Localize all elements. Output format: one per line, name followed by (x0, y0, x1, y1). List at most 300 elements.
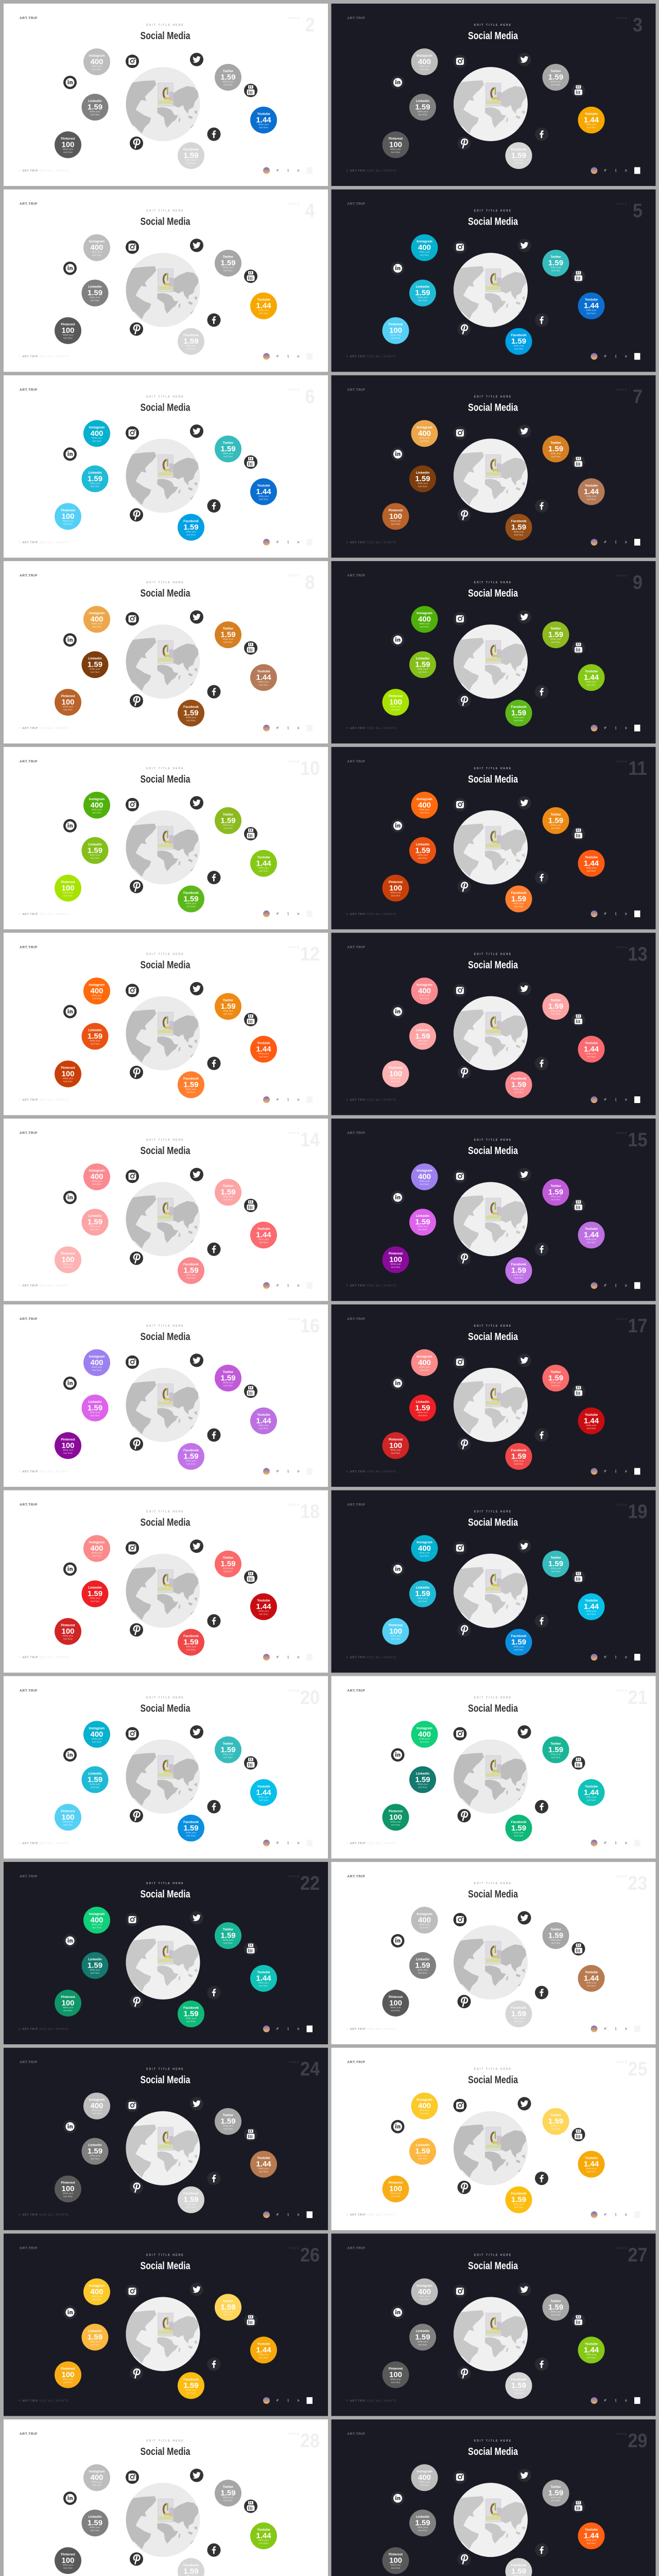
Twitter: Write your (550, 824, 561, 826)
world globe (119, 67, 200, 141)
Youtube: text here (259, 2171, 268, 2173)
Linkedin (81, 837, 108, 864)
world globe (119, 810, 200, 885)
page number: 28 (300, 2429, 320, 2452)
Instagram: text here (420, 1555, 429, 1557)
Facebook: Write your (513, 1831, 524, 1834)
Instagram: Instagram (417, 798, 432, 801)
Instagram: Instagram (417, 983, 432, 987)
Twitter: Twitter (223, 1742, 234, 1745)
Instagram: Instagram (89, 1541, 105, 1545)
Instagram: 400 (90, 1916, 103, 1925)
Linkedin: Write your (90, 854, 100, 856)
brand: ART.TRIP (20, 1131, 38, 1135)
Linkedin: Write your (418, 482, 428, 484)
Facebook: text here (514, 905, 524, 908)
Instagram: text here (92, 2484, 101, 2486)
Twitter (543, 807, 569, 834)
Instagram: 400 (90, 1730, 103, 1739)
page number (617, 2429, 648, 2452)
Facebook: text here (186, 1091, 196, 1093)
Linkedin: Write your (418, 1411, 428, 1414)
slide 16 (4, 1304, 328, 1487)
Facebook (506, 328, 532, 355)
Facebook (178, 2372, 204, 2399)
Pinterest: 100 (389, 884, 402, 892)
Pinterest: Pinterest (389, 1624, 403, 1628)
Linkedin (409, 465, 436, 492)
Instagram (411, 792, 438, 819)
Twitter: Twitter (550, 1556, 561, 1560)
slide 10 (4, 747, 328, 929)
Pinterest: Pinterest (389, 1066, 403, 1070)
Linkedin (81, 1952, 108, 1979)
Twitter (543, 993, 569, 1020)
Linkedin: 1.59 (415, 846, 430, 855)
brand: ART.TRIP (347, 946, 365, 949)
Facebook: Write your (513, 716, 524, 719)
Pinterest: 100 (61, 1813, 75, 1822)
world globe (119, 1182, 200, 1256)
Instagram: text here (92, 439, 101, 442)
title: Social Media (141, 1888, 190, 1900)
Linkedin: text here (418, 113, 427, 116)
world globe (447, 810, 528, 885)
page number: PAGE (289, 574, 300, 578)
Facebook (178, 1257, 204, 1284)
title: Social Media (141, 30, 190, 41)
page number: PAGE (617, 2247, 628, 2250)
Linkedin: text here (91, 2529, 100, 2532)
Twitter: 1.59 (220, 1745, 236, 1754)
section label: EDIT TITLE HERE (474, 1882, 512, 1885)
Linkedin: 1.59 (415, 2147, 430, 2156)
footer: © ART.TRIP 2022 ALL RIGHTS (346, 2027, 396, 2031)
page number (289, 757, 320, 779)
Instagram (83, 2278, 110, 2305)
Instagram: text here (92, 997, 101, 999)
Youtube (578, 107, 604, 133)
Youtube: Write your (258, 1610, 269, 1613)
brand: ART.TRIP (20, 2061, 38, 2064)
Pinterest: text here (391, 522, 401, 525)
Pinterest: 100 (389, 1999, 402, 2007)
Facebook: Facebook (183, 148, 199, 151)
Pinterest: Write your (63, 519, 74, 522)
Linkedin: Write your (90, 1597, 100, 1600)
page number: PAGE (289, 2433, 300, 2436)
Pinterest: Pinterest (61, 1438, 76, 1442)
Instagram: Write your (419, 436, 430, 439)
Linkedin: Write your (90, 296, 100, 299)
Pinterest: 100 (389, 1070, 402, 1078)
page number: 4 (305, 199, 315, 222)
Youtube: text here (259, 312, 268, 315)
Facebook: Facebook (511, 148, 527, 151)
Twitter: Twitter (550, 441, 561, 445)
Pinterest: Write your (390, 1820, 401, 1823)
Linkedin: Linkedin (416, 657, 429, 660)
Twitter: Twitter (550, 1370, 561, 1374)
Twitter: Write your (223, 824, 234, 826)
brand: ART.TRIP (347, 388, 365, 392)
Instagram: Write your (419, 1737, 430, 1740)
Facebook: text here (514, 162, 524, 164)
Facebook (178, 2558, 204, 2576)
Twitter: Twitter (550, 2114, 561, 2117)
Facebook (506, 1815, 532, 1841)
Linkedin: Write your (418, 1969, 428, 1971)
Instagram: text here (92, 811, 101, 814)
Instagram: 400 (418, 987, 431, 995)
footer: © ART.TRIP 2022 ALL RIGHTS (346, 912, 396, 916)
Pinterest: Pinterest (389, 1438, 403, 1442)
world globe (447, 67, 528, 141)
Twitter: Twitter (223, 1556, 234, 1560)
Pinterest: Write your (390, 148, 401, 150)
Twitter: text here (551, 455, 561, 457)
Facebook: text here (186, 2392, 196, 2394)
Linkedin (81, 1395, 108, 1421)
Linkedin (81, 2138, 108, 2165)
Pinterest: Write your (63, 2378, 74, 2380)
Twitter (543, 1551, 569, 1578)
page number: 29 (628, 2429, 648, 2452)
page number: 25 (628, 2058, 648, 2080)
Facebook: Write your (186, 1274, 197, 1276)
Instagram (83, 2093, 110, 2120)
page number (289, 199, 315, 222)
Linkedin (409, 651, 436, 678)
world globe (447, 2483, 528, 2557)
Pinterest (382, 1060, 409, 1087)
brand: ART.TRIP (347, 760, 365, 764)
slide 24 (4, 2048, 328, 2230)
Twitter: text here (551, 83, 561, 86)
title: Social Media (141, 216, 190, 227)
footer: © ART.TRIP 2022 ALL RIGHTS (19, 1656, 69, 1659)
Twitter (215, 435, 241, 462)
Linkedin: Write your (418, 1040, 428, 1042)
Instagram: Write your (419, 808, 430, 811)
Instagram: text here (92, 625, 101, 628)
Linkedin: Write your (418, 2340, 428, 2343)
social icons (63, 1725, 257, 1822)
Linkedin: Write your (90, 110, 100, 113)
Facebook: text here (186, 2206, 196, 2209)
Twitter: Write your (223, 2310, 234, 2313)
Instagram: Write your (92, 1366, 102, 1368)
Facebook: text here (186, 348, 196, 350)
Twitter (543, 64, 569, 91)
Linkedin: 1.59 (88, 1218, 102, 1227)
Twitter (543, 2294, 569, 2320)
Linkedin: text here (418, 1600, 427, 1603)
Instagram (83, 1163, 110, 1190)
Twitter: Write your (550, 1753, 561, 1755)
Pinterest: Pinterest (389, 1995, 403, 1999)
Pinterest: Pinterest (61, 2553, 76, 2556)
Instagram: Instagram (417, 1726, 432, 1730)
Twitter: 1.59 (548, 1188, 563, 1197)
world globe (119, 624, 200, 699)
Facebook: Facebook (183, 2192, 199, 2196)
Pinterest: text here (63, 2195, 73, 2198)
Youtube: text here (259, 1799, 268, 1801)
Youtube: Youtube (585, 1042, 598, 1045)
Pinterest (382, 1804, 409, 1831)
Instagram: text here (420, 997, 429, 999)
Youtube: Youtube (257, 670, 270, 673)
Instagram: Instagram (89, 1912, 105, 1916)
Youtube: 1.44 (584, 1231, 599, 1240)
Pinterest (55, 1618, 81, 1645)
slide 3 (332, 4, 656, 186)
Pinterest: 100 (61, 140, 75, 149)
Linkedin: Linkedin (88, 1772, 102, 1775)
Facebook: 1.59 (183, 1266, 199, 1275)
Youtube: Youtube (257, 1785, 270, 1788)
Youtube (250, 664, 277, 691)
Linkedin: Linkedin (88, 843, 102, 846)
Youtube (250, 1036, 277, 1062)
Twitter: text here (551, 1198, 561, 1201)
page number (289, 1500, 320, 1522)
Facebook (178, 700, 204, 726)
Twitter: text here (223, 1384, 233, 1387)
Youtube (578, 2522, 604, 2549)
Pinterest: 100 (61, 2556, 75, 2565)
Facebook: text here (514, 1834, 524, 1837)
world globe (447, 438, 528, 513)
Youtube (578, 1594, 604, 1620)
title: Social Media (141, 2260, 190, 2272)
Pinterest: 100 (389, 140, 402, 149)
Facebook: Facebook (511, 2192, 527, 2196)
Facebook: Write your (186, 902, 197, 905)
Instagram: Instagram (417, 1541, 432, 1545)
Facebook: text here (186, 533, 196, 536)
Youtube: Youtube (257, 484, 270, 487)
Linkedin: Linkedin (88, 2515, 102, 2519)
page number: PAGE (617, 1689, 628, 1692)
Pinterest (382, 1618, 409, 1645)
page number (289, 13, 315, 36)
Linkedin: text here (418, 2343, 427, 2346)
page number (617, 199, 643, 222)
brand: ART.TRIP (347, 1875, 365, 1878)
Facebook (178, 1072, 204, 1098)
Youtube: Youtube (585, 112, 598, 116)
Instagram: 400 (90, 429, 103, 438)
Linkedin: Linkedin (88, 2329, 102, 2333)
Facebook: text here (514, 1463, 524, 1465)
Pinterest: Pinterest (389, 1809, 403, 1813)
page number (617, 1686, 648, 1708)
Youtube: text here (259, 1055, 268, 1058)
Facebook (178, 328, 204, 355)
Facebook: 1.59 (511, 337, 526, 346)
Twitter (215, 1736, 241, 1763)
Instagram: text here (420, 254, 429, 257)
page number: PAGE (289, 2247, 300, 2250)
Twitter: 1.59 (548, 1560, 563, 1568)
Instagram: Instagram (417, 240, 432, 244)
brand: ART.TRIP (347, 1317, 365, 1321)
Twitter: text here (551, 1756, 561, 1758)
Twitter: Write your (223, 638, 234, 640)
footer (19, 1468, 313, 1475)
Pinterest: Write your (390, 1635, 401, 1637)
world globe (447, 1739, 528, 1814)
Pinterest: Pinterest (61, 1252, 76, 1256)
page number: PAGE (289, 388, 300, 392)
Linkedin: 1.59 (88, 1403, 102, 1412)
Twitter: Write your (550, 452, 561, 454)
Instagram: Instagram (89, 798, 105, 801)
Twitter: 1.59 (548, 816, 563, 825)
Linkedin: text here (418, 485, 427, 487)
Youtube (250, 2522, 277, 2549)
Youtube: Youtube (257, 1599, 270, 1603)
Pinterest: Write your (390, 1449, 401, 1451)
Linkedin (81, 1023, 108, 1050)
Facebook: Write your (513, 1088, 524, 1090)
Linkedin: Linkedin (88, 1214, 102, 1218)
Pinterest: 100 (61, 1256, 75, 1264)
Twitter (543, 250, 569, 277)
Instagram: 400 (90, 58, 103, 66)
Pinterest: text here (391, 1823, 401, 1826)
Twitter: Write your (223, 2496, 234, 2499)
Linkedin: Write your (418, 296, 428, 299)
Instagram (83, 1349, 110, 1376)
Instagram: 400 (418, 243, 431, 252)
Linkedin (81, 94, 108, 121)
Facebook (506, 2558, 532, 2576)
page number (617, 1500, 648, 1522)
social icons (63, 239, 257, 336)
Twitter: Twitter (223, 1184, 234, 1188)
Linkedin: text here (91, 113, 100, 116)
page number: 2 (305, 13, 315, 36)
Instagram: text here (92, 2112, 101, 2115)
Pinterest: Pinterest (61, 323, 76, 327)
Youtube (578, 2336, 604, 2363)
social icons (63, 1353, 257, 1451)
page number (289, 1872, 320, 1894)
Pinterest: Pinterest (61, 1809, 76, 1813)
Twitter: 1.59 (548, 1374, 563, 1382)
footer: © ART.TRIP 2022 ALL RIGHTS (346, 2399, 396, 2402)
Pinterest (382, 1246, 409, 1273)
Youtube: text here (259, 126, 268, 129)
Youtube: Youtube (585, 2157, 598, 2160)
Facebook: text here (514, 2206, 524, 2209)
Instagram (411, 1349, 438, 1376)
Instagram (83, 792, 110, 819)
Facebook: 1.59 (511, 1638, 526, 1647)
footer (346, 353, 640, 360)
Linkedin: text here (91, 1228, 100, 1231)
section label: EDIT TITLE HERE (146, 1882, 184, 1885)
Facebook: 1.59 (183, 1080, 199, 1089)
page number: 23 (628, 1872, 648, 1894)
section label: EDIT TITLE HERE (146, 767, 184, 770)
Twitter: Twitter (223, 2485, 234, 2489)
Pinterest: 100 (61, 884, 75, 892)
brand: ART.TRIP (347, 1689, 365, 1692)
Linkedin: Linkedin (416, 1958, 429, 1961)
Facebook: Write your (513, 345, 524, 347)
Youtube: text here (587, 1427, 596, 1430)
Twitter: text here (223, 827, 233, 829)
Pinterest (55, 1246, 81, 1273)
Facebook: Facebook (183, 2564, 199, 2567)
Facebook: Write your (186, 1646, 197, 1648)
page number: 5 (633, 199, 643, 222)
title: Social Media (468, 1888, 518, 1900)
footer (346, 1840, 640, 1846)
page number: PAGE (617, 1318, 628, 1321)
Linkedin: Write your (418, 110, 428, 113)
slide 22 (4, 1862, 328, 2044)
page number: 6 (305, 385, 315, 408)
section label: EDIT TITLE HERE (146, 1325, 184, 1328)
Linkedin (81, 1209, 108, 1235)
Youtube: text here (587, 1799, 596, 1801)
Facebook: 1.59 (511, 151, 526, 160)
Pinterest (55, 131, 81, 158)
title: Social Media (141, 959, 190, 971)
page number (617, 385, 643, 408)
Instagram: 400 (90, 987, 103, 995)
Twitter (215, 1365, 241, 1392)
Youtube: 1.44 (256, 673, 271, 682)
Pinterest: Write your (63, 2006, 74, 2009)
section label: EDIT TITLE HERE (474, 2253, 512, 2257)
page number (289, 385, 315, 408)
slide 17 (332, 1304, 656, 1487)
Twitter: Write your (223, 2125, 234, 2127)
page number: 26 (300, 2244, 320, 2266)
brand: ART.TRIP (20, 1503, 38, 1507)
Twitter: text here (223, 1570, 233, 1573)
Facebook: 1.59 (183, 337, 199, 346)
Youtube: Write your (258, 1981, 269, 1984)
Twitter: Twitter (223, 256, 234, 259)
Twitter: Write your (550, 1010, 561, 1012)
Linkedin: 1.59 (415, 2333, 430, 2342)
Facebook: text here (186, 1463, 196, 1465)
Instagram (411, 420, 438, 447)
Instagram: Write your (92, 1552, 102, 1554)
Linkedin: Write your (90, 2155, 100, 2157)
slide 19 (332, 1490, 656, 1673)
Youtube: Youtube (257, 2528, 270, 2532)
Linkedin: Write your (90, 668, 100, 670)
Youtube (578, 293, 604, 319)
Pinterest: text here (63, 1823, 73, 1826)
Twitter (543, 1179, 569, 1206)
Instagram: text here (420, 2484, 429, 2486)
Instagram: Instagram (417, 2284, 432, 2287)
Facebook: Facebook (511, 2006, 527, 2010)
footer (346, 910, 640, 917)
Facebook: Write your (186, 1831, 197, 1834)
Linkedin: text here (91, 1043, 100, 1045)
Linkedin: 1.59 (88, 1589, 102, 1598)
